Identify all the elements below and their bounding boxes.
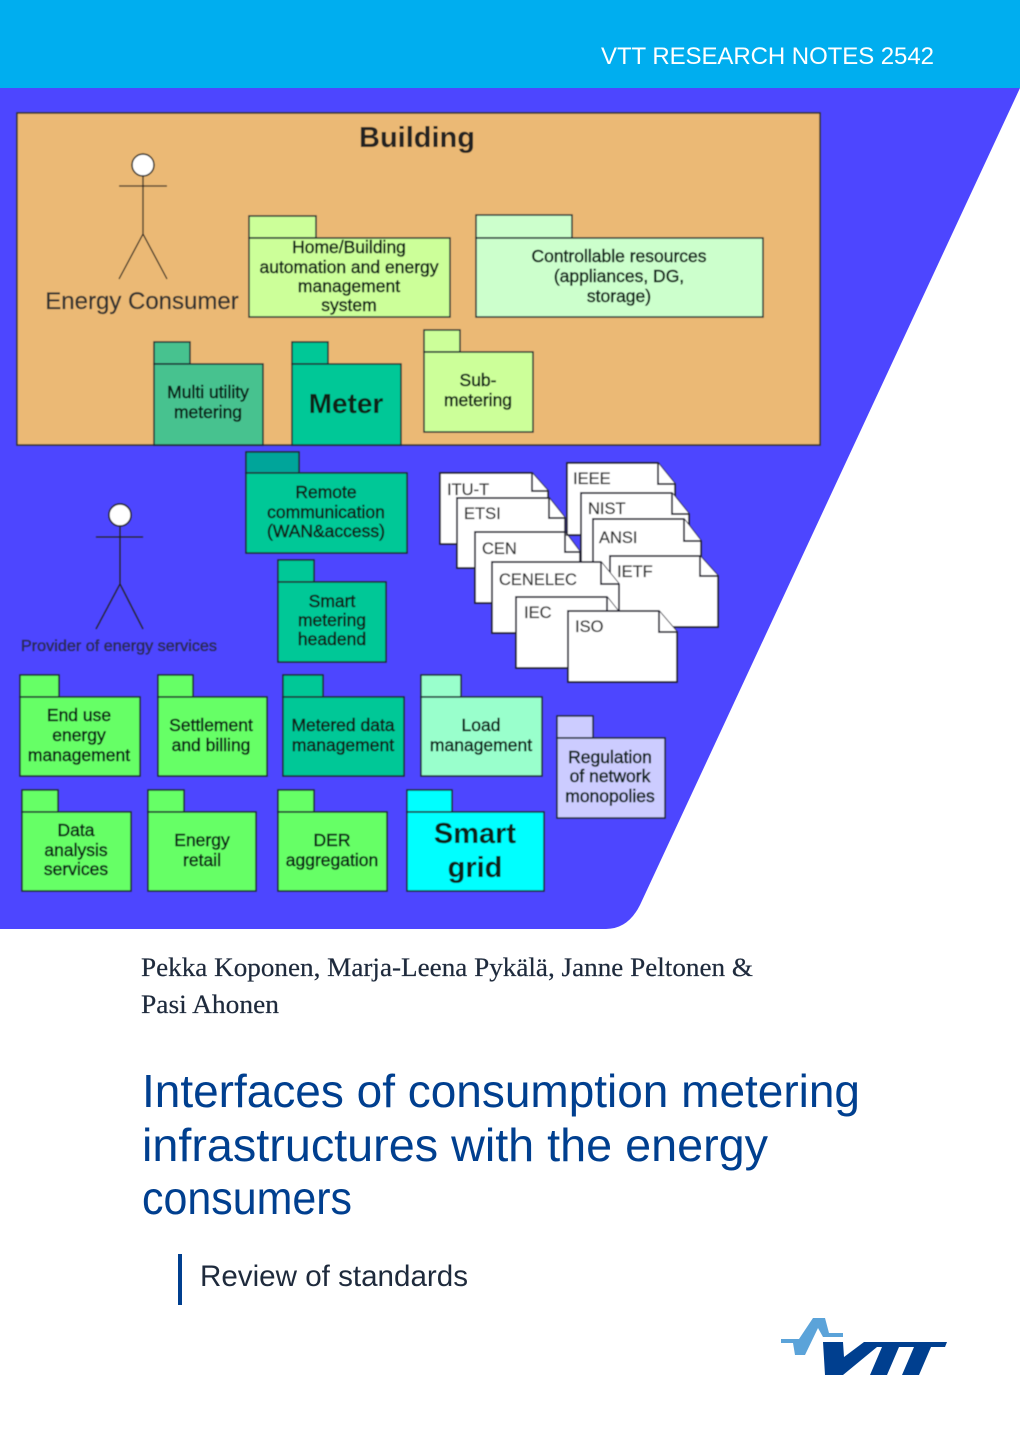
authors: Pasi Ahonen <box>141 990 279 1019</box>
folder: settlement and billing: and billing <box>172 735 250 755</box>
document: IEEE: IEEE <box>573 470 611 488</box>
actor: energy consumer <box>45 154 239 315</box>
document: IETF: IETF <box>617 563 653 581</box>
folder: controllable resources: (appliances, DG, <box>554 266 684 286</box>
folder: load management <box>421 675 542 776</box>
folder: home automation: system <box>321 295 377 315</box>
document: IEC: IEC <box>524 604 552 622</box>
folder: settlement and billing: Settlement <box>169 715 253 735</box>
folder: DER aggregation: aggregation <box>286 850 378 870</box>
folder: end use energy management: management <box>28 745 130 765</box>
folder: metered data management: management <box>292 735 394 755</box>
folder: controllable resources <box>476 215 763 317</box>
panel: building <box>17 113 820 445</box>
authors <box>141 953 753 1019</box>
folder: smart metering headend <box>278 560 386 662</box>
document: NIST <box>581 493 689 570</box>
folder: settlement and billing <box>158 675 267 776</box>
document: CEN: CEN <box>482 540 517 558</box>
folder: remote communication: communication <box>267 502 385 522</box>
folder: remote communication: (WAN&access) <box>267 521 385 541</box>
folder: meter <box>292 342 401 445</box>
folder: smart grid <box>407 790 544 891</box>
folder: controllable resources: storage) <box>587 286 651 306</box>
document: CEN <box>475 532 580 603</box>
folder: load management: management <box>430 735 532 755</box>
folder: metered data management: Metered data <box>291 715 395 735</box>
folder: regulation of network monopolies: Regulation <box>568 747 652 767</box>
folder: sub-metering <box>424 330 533 432</box>
subtitle: Review of standards <box>200 1260 468 1293</box>
document: CENELEC: CENELEC <box>499 571 577 589</box>
standards documents <box>440 463 718 682</box>
folder: multi utility metering: metering <box>174 402 242 422</box>
folder: end use energy management: energy <box>52 725 106 745</box>
folder: smart metering headend: metering <box>298 610 366 630</box>
heading: building: Building <box>359 122 475 154</box>
document: ITU-T <box>440 473 548 544</box>
document: IEC <box>516 597 619 668</box>
folder: data analysis services: Data <box>58 820 95 840</box>
header band <box>0 0 1020 88</box>
document: ISO <box>568 611 677 682</box>
actor: energy consumer: Energy Consumer <box>45 288 239 315</box>
document: CENELEC <box>492 562 619 633</box>
folder: end use energy management <box>20 675 140 776</box>
folder: metered data management <box>283 675 404 776</box>
folder: home automation: automation and energy <box>259 257 439 277</box>
document: ISO: ISO <box>575 618 604 636</box>
title: Interfaces of consumption metering <box>142 1065 860 1117</box>
title <box>142 1065 860 1224</box>
folder: regulation of network monopolies: monopolies <box>565 786 655 806</box>
actor: provider of energy services: Provider of energy services <box>21 638 217 655</box>
folder: remote communication: Remote <box>295 482 357 502</box>
title: infrastructures with the energy <box>142 1119 768 1171</box>
folder: regulation of network monopolies: of network <box>570 766 651 786</box>
document: ETSI: ETSI <box>464 505 501 523</box>
blue cover panel <box>0 88 1020 929</box>
folder: home automation <box>249 216 450 317</box>
document: ITU-T: ITU-T <box>447 481 489 499</box>
actor: provider of energy services <box>21 504 217 655</box>
document: ETSI <box>457 498 565 568</box>
folder: DER aggregation <box>278 790 387 891</box>
folder: smart metering headend: Smart <box>309 591 355 611</box>
series label: VTT RESEARCH NOTES 2542 <box>601 43 934 70</box>
document: ANSI: ANSI <box>599 529 638 547</box>
document: NIST: NIST <box>588 500 626 518</box>
icon: VTT logo <box>781 1318 947 1375</box>
folder: smart grid: Smart <box>434 818 516 850</box>
folder: remote communication <box>246 452 407 553</box>
folder: DER aggregation: DER <box>314 830 350 850</box>
folder: data analysis services: analysis <box>44 840 108 860</box>
folder: regulation of network monopolies <box>557 716 665 818</box>
document: IETF <box>610 556 718 627</box>
folder: home automation: management <box>298 276 400 296</box>
folder: load management: Load <box>462 715 500 735</box>
folder: smart metering headend: headend <box>298 629 366 649</box>
folder: energy retail: Energy <box>174 830 230 850</box>
authors: Pekka Koponen, Marja-Leena Pykälä, Janne Peltonen & <box>141 953 753 982</box>
folder: data analysis services: services <box>44 859 108 879</box>
folder: sub-metering: metering <box>444 390 512 410</box>
folder: smart grid: grid <box>448 852 502 884</box>
folder: multi utility metering: Multi utility <box>167 382 249 402</box>
diagram <box>17 113 820 891</box>
document: IEEE <box>567 463 675 535</box>
folder: energy retail: retail <box>183 850 221 870</box>
document: ANSI <box>593 519 701 590</box>
folder: home automation: Home/Building <box>292 237 406 257</box>
title: consumers <box>142 1172 352 1224</box>
folder: controllable resources: Controllable resources <box>531 246 707 266</box>
subtitle rule <box>178 1254 182 1305</box>
folder: end use energy management: End use <box>47 705 111 725</box>
folder: multi utility metering <box>154 342 263 445</box>
folder: energy retail <box>148 790 256 891</box>
folder: data analysis services <box>22 790 131 891</box>
folder: meter: Meter <box>309 388 383 419</box>
folder: sub-metering: Sub- <box>460 370 497 390</box>
